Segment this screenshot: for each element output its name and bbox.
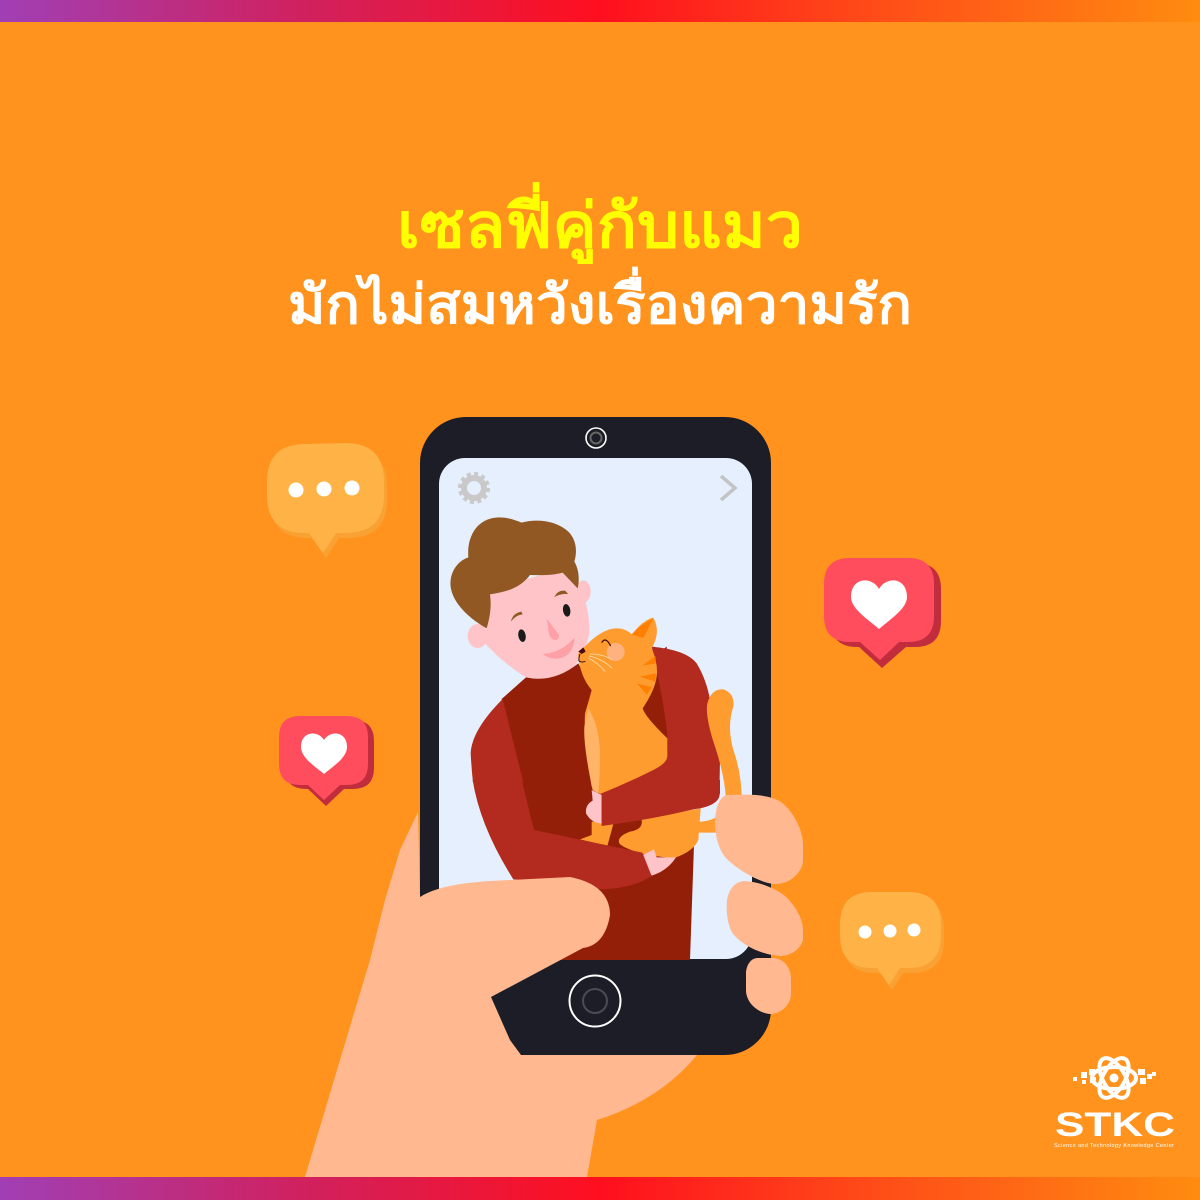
title: มักไม่สมหวังเรื่องความรัก bbox=[288, 266, 912, 335]
finger 1 bbox=[715, 795, 803, 884]
cat lower body bbox=[619, 808, 701, 858]
logo caption: Science and Technology Knowledge Center bbox=[1054, 1143, 1174, 1149]
cat tail bbox=[707, 689, 742, 800]
whiskers bbox=[588, 654, 613, 671]
cat stripes bbox=[637, 656, 656, 695]
cat ear inner bbox=[632, 618, 653, 638]
right shoulder bbox=[600, 647, 720, 822]
cat tail connecting bbox=[697, 812, 723, 833]
cat nose and mouth bbox=[578, 647, 586, 654]
icon: chat bubble bottom right bbox=[840, 892, 944, 990]
phone bbox=[420, 417, 771, 1055]
cat belly bbox=[584, 708, 600, 793]
title bbox=[288, 182, 912, 335]
left sleeve bbox=[471, 699, 523, 783]
torso bbox=[502, 647, 694, 960]
title: เซลฟี่คู่กับแมว bbox=[397, 182, 803, 264]
bottom gradient bar bbox=[0, 1177, 1200, 1200]
cat eye bbox=[602, 640, 611, 646]
hand bbox=[305, 795, 803, 1177]
man's hair bbox=[450, 517, 579, 628]
palm and thumb bbox=[305, 812, 697, 1177]
man's ears bbox=[468, 580, 591, 648]
finger 3 bbox=[746, 958, 791, 1014]
icon: settings gear bbox=[460, 474, 488, 502]
illustration: man and cat bbox=[450, 517, 742, 960]
cat back leg bbox=[580, 822, 614, 846]
hands of man bbox=[586, 790, 602, 823]
logo emblem bbox=[1073, 1053, 1156, 1103]
icon: chevron bbox=[721, 476, 735, 500]
icon: heart bubble left bbox=[279, 716, 374, 806]
icon: chat bubble top left bbox=[267, 443, 387, 558]
finger 2 bbox=[727, 881, 803, 956]
cat cheek bbox=[607, 643, 625, 661]
face details bbox=[511, 591, 575, 659]
camera bbox=[586, 428, 606, 448]
cat body bbox=[578, 618, 667, 794]
upper sleeve bbox=[602, 780, 720, 826]
top gradient bar bbox=[0, 0, 1200, 22]
logo: STKC bbox=[1054, 1053, 1175, 1149]
phone screen bbox=[439, 458, 752, 959]
man's face bbox=[485, 568, 589, 679]
home button bbox=[570, 976, 620, 1026]
lower sleeve bbox=[473, 780, 652, 889]
icon: heart bubble right bbox=[824, 558, 941, 668]
logo wordmark: STKC bbox=[1055, 1106, 1175, 1144]
